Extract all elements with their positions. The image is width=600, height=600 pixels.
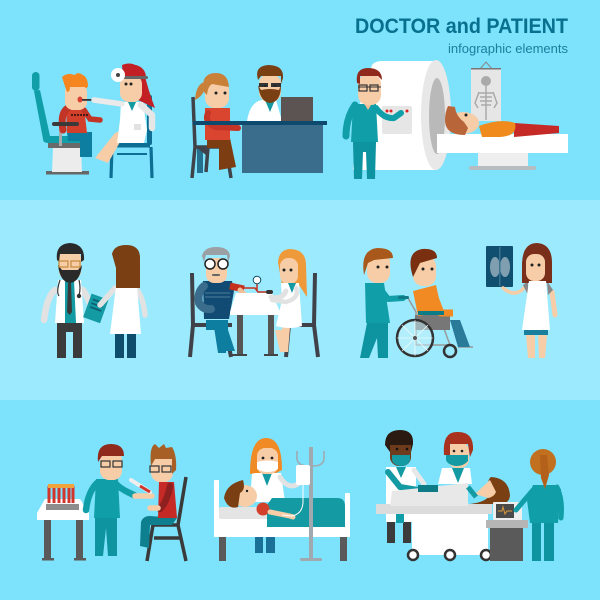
nurse from behind [516, 449, 562, 561]
blonde nurse [271, 249, 307, 352]
scene: blood pressure measurement [190, 247, 318, 357]
scene: MRI scan [346, 60, 568, 179]
sphygmomanometer [243, 276, 273, 294]
skeleton poster [471, 62, 501, 121]
female colleague from behind [100, 245, 145, 358]
wheelchair [397, 296, 473, 357]
redhead surgeon [438, 432, 473, 484]
title [355, 15, 568, 56]
desk top [193, 121, 327, 125]
x-ray film [486, 246, 513, 287]
scene: nurse pushing wheelchair [360, 248, 473, 358]
scene: surgery [376, 430, 562, 561]
patient with syringe [131, 444, 177, 548]
scene: blood test [37, 444, 186, 561]
control panel [382, 106, 412, 134]
desk [197, 125, 323, 173]
IV drip stand [282, 447, 324, 561]
female doctor [503, 243, 555, 358]
ECG monitor cart [486, 502, 528, 561]
wheelchair patient [410, 249, 470, 347]
scene: ENT doctor examining boy [32, 64, 155, 178]
doctor drawing blood [86, 444, 134, 556]
laptop [281, 97, 313, 121]
title: DOCTOR and PATIENT [355, 15, 568, 38]
scene: IV drip in hospital bed [214, 438, 350, 561]
scene: doctor with x-ray [486, 243, 555, 358]
bearded doctor with stethoscope [44, 243, 92, 358]
nurse with mask [250, 438, 298, 553]
dark-skinned surgeon [385, 430, 424, 543]
gurney [376, 483, 492, 560]
nurse chair [285, 273, 318, 357]
girl patient and chair [192, 73, 238, 178]
bearded doctor [247, 65, 283, 121]
boy patient [52, 73, 100, 157]
technician [346, 68, 401, 179]
table [230, 293, 280, 356]
MRI machine [353, 60, 568, 170]
hospital bed [214, 480, 350, 561]
ENT doctor [94, 64, 155, 178]
male nurse [360, 248, 403, 358]
patient on gurney [468, 477, 510, 504]
patient chair [190, 273, 232, 357]
patient on MRI table [445, 106, 559, 137]
scene: consultation at desk [192, 65, 327, 178]
old man patient [199, 247, 250, 353]
bed patient [224, 480, 293, 517]
scene: doctor with colleague reviewing chart [44, 243, 145, 358]
patient chair [147, 477, 186, 561]
title: infographic elements [448, 41, 568, 56]
dental chair [32, 72, 89, 174]
clipboard [83, 294, 109, 323]
lab table with tubes [37, 486, 89, 560]
